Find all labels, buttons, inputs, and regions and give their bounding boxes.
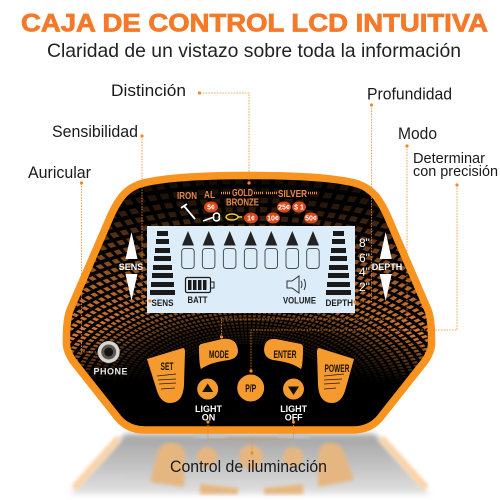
light on label: ON xyxy=(202,412,215,422)
enter button: ENTER xyxy=(274,349,297,361)
dotted tunnel pattern xyxy=(70,180,428,378)
LCD labels: VOLUME xyxy=(283,296,316,306)
phone jack: PHONE xyxy=(93,366,128,376)
target segments xyxy=(182,248,319,268)
enter button xyxy=(264,339,303,369)
LCD labels: DEPTH xyxy=(326,298,353,308)
callout: Determinar con precisión: Determinar xyxy=(413,151,485,167)
depth arrows and scale: DEPTH xyxy=(372,262,402,272)
callout: Distinción xyxy=(111,82,251,185)
sensitivity bars xyxy=(150,231,175,295)
device body xyxy=(62,172,436,434)
light off label: OFF xyxy=(285,412,303,422)
depth arrows and scale: 4" xyxy=(359,265,370,279)
light off label: LIGHT xyxy=(280,404,308,414)
depth arrows and scale xyxy=(359,232,402,301)
sens arrows: SENS xyxy=(119,262,143,272)
callout: Sensibilidad: Sensibilidad xyxy=(52,123,138,141)
light off label xyxy=(280,404,308,422)
set button: SET xyxy=(160,361,174,373)
mode button: MODE xyxy=(209,349,229,361)
callout: Modo: Modo xyxy=(398,125,437,143)
mode button xyxy=(199,339,238,369)
LCD screen xyxy=(147,226,355,313)
black faceplate xyxy=(66,176,432,430)
depth arrows and scale: 2" xyxy=(359,280,370,294)
LCD labels: BATT xyxy=(188,295,208,305)
light up button xyxy=(197,378,218,400)
icon: battery xyxy=(186,278,214,292)
callout: Sensibilidad xyxy=(52,123,152,303)
power button xyxy=(317,348,354,403)
callout: Distinción: Distinción xyxy=(111,82,186,100)
icon: pull tab xyxy=(203,213,220,221)
LCD labels: SENS xyxy=(152,298,174,308)
light on label xyxy=(195,404,222,422)
LCD labels xyxy=(152,295,353,308)
metal labels row: AL xyxy=(204,190,215,201)
callout: Modo xyxy=(220,125,437,339)
callout: Profundidad xyxy=(353,86,452,304)
depth arrows and scale: 8" xyxy=(359,236,370,250)
coin markers: 5¢ xyxy=(207,204,215,212)
metal labels row: IRON xyxy=(177,191,197,202)
coin markers: 10¢ xyxy=(267,216,279,222)
metal labels row xyxy=(177,188,318,208)
metal labels row: GOLD xyxy=(232,188,253,199)
power button: POWER xyxy=(324,363,350,375)
callout: Auricular: Auricular xyxy=(28,164,91,182)
callout: Auricular xyxy=(28,164,98,352)
callout: Determinar con precisión: con precisión xyxy=(413,164,498,180)
callout: Control de iluminación: Control de iluminación xyxy=(170,458,327,476)
play pause button xyxy=(237,374,264,402)
device reflection xyxy=(70,434,430,494)
set button xyxy=(147,348,185,403)
coin markers xyxy=(204,202,318,224)
metal labels row: BRONZE xyxy=(226,198,259,208)
target triangles xyxy=(182,231,319,246)
orange casing xyxy=(66,176,432,430)
callout: Control de iluminación xyxy=(170,420,327,476)
title: CAJA DE CONTROL LCD INTUITIVA xyxy=(21,10,488,38)
light on label: LIGHT xyxy=(195,404,222,414)
subtitle: Claridad de un vistazo sobre toda la información xyxy=(47,40,461,62)
coin markers: 1¢ xyxy=(247,216,255,222)
depth bars xyxy=(326,231,351,295)
sens arrows xyxy=(119,232,143,300)
play pause button: P/P xyxy=(245,383,256,395)
callout: Profundidad: Profundidad xyxy=(367,86,452,104)
depth arrows and scale: 6" xyxy=(359,251,370,265)
light down button xyxy=(283,378,304,400)
phone jack xyxy=(93,341,128,376)
callout: Determinar con precisión xyxy=(249,151,498,373)
coin markers: $ 1 xyxy=(294,204,304,212)
coin markers: 25¢ xyxy=(278,204,290,212)
coin markers: 50¢ xyxy=(305,216,317,222)
icon: nail xyxy=(181,204,195,219)
metal labels row: SILVER xyxy=(278,189,308,200)
icon: speaker xyxy=(287,276,306,293)
icon: gold ring xyxy=(226,214,242,220)
